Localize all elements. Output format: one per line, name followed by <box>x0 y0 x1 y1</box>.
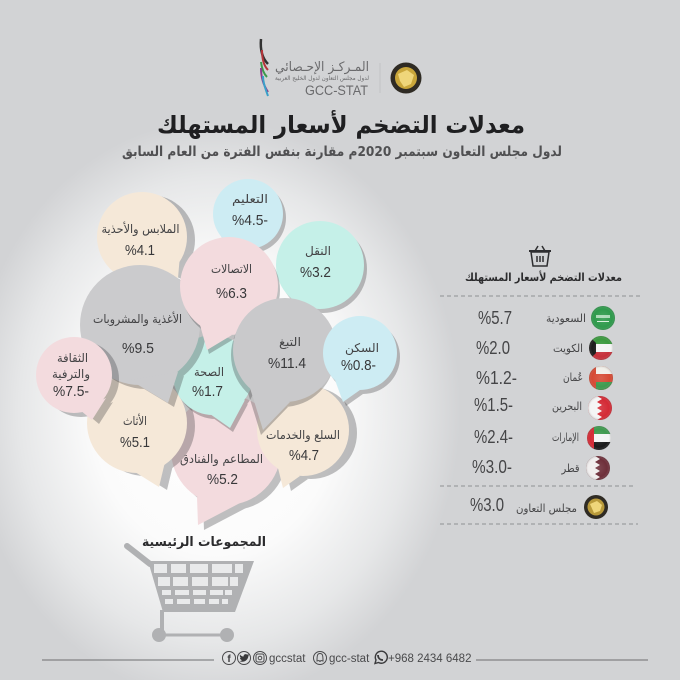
bubble: education: %4.5- <box>232 212 268 229</box>
row: GCC: مجلس التعاون <box>516 502 577 515</box>
bubble: food and beverages: %9.5 <box>122 340 154 357</box>
icon: twitter <box>238 652 250 664</box>
bubble: clothing and footwear: %4.1 <box>125 242 155 259</box>
label: health: الصحة <box>194 365 224 379</box>
icon: facebook: f <box>227 654 231 665</box>
bubble chart: main groups <box>36 179 400 530</box>
row: Kuwait: الكويت <box>553 342 583 355</box>
bubble: restaurants and hotels <box>171 395 287 530</box>
bubble: tobacco: التبغ <box>279 335 301 349</box>
bubble: culture and recreation: %7.5- <box>53 383 89 400</box>
bubble: furniture: الأثاث <box>123 413 147 428</box>
bubble: health <box>173 335 256 432</box>
row: Qatar: %3.0- <box>472 457 512 477</box>
label: health: %1.7 <box>192 383 223 400</box>
row: Bahrain <box>474 395 612 420</box>
icon: whatsapp <box>375 651 387 664</box>
bubble: transport <box>276 221 367 313</box>
row: UAE: الإمارات <box>552 431 579 444</box>
bubble: communications: %6.3 <box>216 285 247 302</box>
logo: GCC-STAT: لدول مجلس التعاون لدول الخليج العربية <box>275 75 369 82</box>
bubble: education <box>213 179 286 253</box>
bubble: housing: السكن <box>345 341 379 356</box>
logo: GCC-STAT <box>261 39 422 98</box>
icon: shopping cart <box>127 546 254 642</box>
row: Qatar: قطر <box>561 462 580 475</box>
phone number: +968 2434 6482 <box>388 653 471 665</box>
row: Kuwait <box>476 336 613 360</box>
bubble: transport: %3.2 <box>300 264 331 281</box>
label: restaurants and hotels: %5.2 <box>207 471 238 488</box>
row: GCC <box>470 495 608 519</box>
row: Qatar <box>472 456 610 480</box>
row: Oman: %1.2- <box>476 368 517 388</box>
logo: GCC-STAT: GCC-STAT <box>305 83 368 98</box>
bubble: communications <box>180 237 280 354</box>
icon: basket <box>529 246 551 266</box>
bubble: transport: النقل <box>305 244 331 258</box>
label: health <box>192 365 224 400</box>
row: Saudi Arabia: %5.7 <box>478 308 512 328</box>
logo: GCC-STAT: المـركـز الإحـصائي <box>275 60 369 75</box>
bubble: culture and recreation: الثقافة <box>57 351 88 365</box>
bubble: tobacco: %11.4 <box>268 355 306 372</box>
bubble: food and beverages <box>80 265 206 407</box>
row: Saudi Arabia: السعودية <box>546 312 586 325</box>
row: Oman <box>476 366 613 390</box>
subtitle: لدول مجلس التعاون سبتمبر 2020م مقارنة بنفس الفترة من العام السابق <box>122 144 562 160</box>
bubble: housing: %0.8- <box>341 357 376 374</box>
bubble: tobacco <box>231 298 337 435</box>
bubble: food and beverages: الأغذية والمشروبات <box>93 311 182 327</box>
icon: snapchat <box>314 652 326 664</box>
bubble: housing <box>323 316 400 406</box>
footer: contact <box>42 651 648 665</box>
row: UAE: %2.4- <box>474 427 513 447</box>
bubble: furniture: %5.1 <box>120 434 150 451</box>
bubble: furniture <box>87 373 195 490</box>
label: restaurants and hotels: المطاعم والفنادق <box>180 452 263 467</box>
row: Saudi Arabia <box>478 305 616 331</box>
bubble: clothing and footwear: الملابس والأحذية <box>102 221 180 237</box>
bubble: communications: الاتصالات <box>211 262 252 276</box>
handle: gcc-stat: gcc-stat <box>329 653 370 665</box>
panel heading: معدلات التضخم لأسعار المستهلك <box>465 270 622 284</box>
row: Oman: عُمان <box>563 371 583 384</box>
handle: gccstat: gccstat <box>269 653 306 665</box>
title: معدلات التضخم لأسعار المستهلك <box>157 110 525 139</box>
icon: instagram <box>254 652 266 664</box>
bubble: goods and services: السلع والخدمات <box>266 428 340 443</box>
bubble: culture and recreation <box>36 337 119 424</box>
row: Kuwait: %2.0 <box>476 338 510 358</box>
row: UAE <box>474 426 611 450</box>
row: Bahrain: %1.5- <box>474 395 513 415</box>
panel: inflation by country <box>440 246 642 524</box>
row: GCC: %3.0 <box>470 495 504 515</box>
label: restaurants and hotels <box>180 452 263 488</box>
bubble: clothing and footwear <box>97 192 195 285</box>
bubble: culture and recreation: والترفية <box>52 367 90 382</box>
icon: facebook <box>222 652 236 665</box>
bubble: goods and services: %4.7 <box>289 447 319 464</box>
bubble: education: التعليم <box>232 192 268 206</box>
bubble: goods and services <box>257 384 357 491</box>
heading: main groups: المجموعات الرئيسية <box>142 535 266 550</box>
row: Bahrain: البحرين <box>552 400 582 413</box>
